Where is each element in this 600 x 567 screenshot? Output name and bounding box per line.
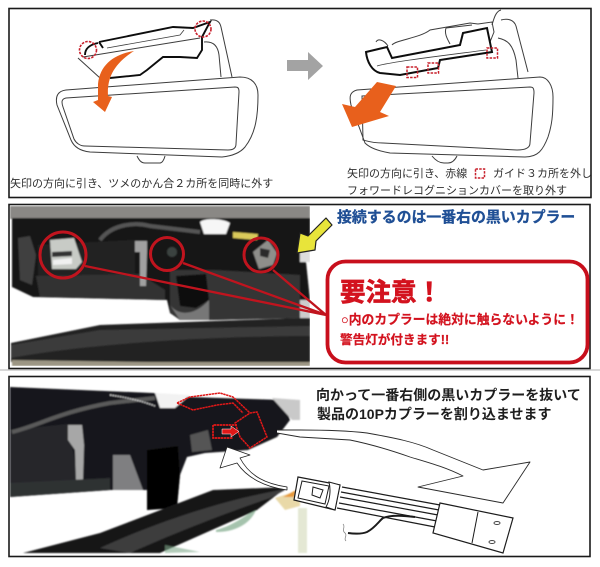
text: do not touch warning: ○内のカプラーは絶対に触らないように！ xyxy=(341,312,579,327)
black cover outline xyxy=(99,22,210,78)
text: insertion instruction: 向かって一番右側の黒いカプラーを抜いて xyxy=(316,387,581,403)
text: insertion instruction xyxy=(316,387,581,422)
diagram: mirror with claws released xyxy=(56,20,258,163)
text: right caption: ガイド３カ所を外し xyxy=(493,166,592,180)
arrow: orange pull direction xyxy=(342,82,396,127)
diagram: mirror with cover removed xyxy=(350,10,553,163)
text: right caption xyxy=(347,166,592,197)
heading: blue connector note: 接続するのは一番右の黒いカプラー xyxy=(337,208,575,226)
text: insertion instruction: 製品の10Pカプラーを割り込ませます xyxy=(317,406,552,422)
text: left caption: 矢印の方向に引き、ツメのかん合２カ所を同時に外す xyxy=(10,176,273,190)
panel: removal steps diagram xyxy=(9,8,592,198)
photo: connectors under mirror xyxy=(10,206,310,366)
arrow: gray next step xyxy=(287,52,323,80)
arrow: white large curved arrow from product xyxy=(277,430,530,503)
text: warning light note: 警告灯が付きます!! xyxy=(340,332,449,347)
icon: red dashed circles marking claws xyxy=(80,21,211,58)
diagram: 10P connector and harness xyxy=(294,477,513,553)
arrow: white curved arrow to connector xyxy=(220,447,287,490)
panel: connector insertion photo xyxy=(9,376,590,556)
text: right caption: フォワードレコグニションカバーを取り外す xyxy=(347,183,567,197)
arrow: small red insert arrow xyxy=(222,426,239,437)
arrow: yellow pointer xyxy=(297,218,332,253)
black cover outline xyxy=(366,28,492,75)
text: right caption: 矢印の方向に引き、赤線 xyxy=(347,166,467,180)
panel: connector location photo xyxy=(9,204,590,368)
icon: red dashed guide squares xyxy=(407,48,498,78)
icon: red dashed connector outline xyxy=(177,393,267,448)
icon: red circles and leader lines xyxy=(40,232,326,315)
heading: caution: 要注意！ xyxy=(340,279,442,307)
callout: caution box xyxy=(328,262,588,362)
arrow: orange curved pull direction xyxy=(93,51,134,112)
photo: black connector behind mirror xyxy=(10,387,307,553)
